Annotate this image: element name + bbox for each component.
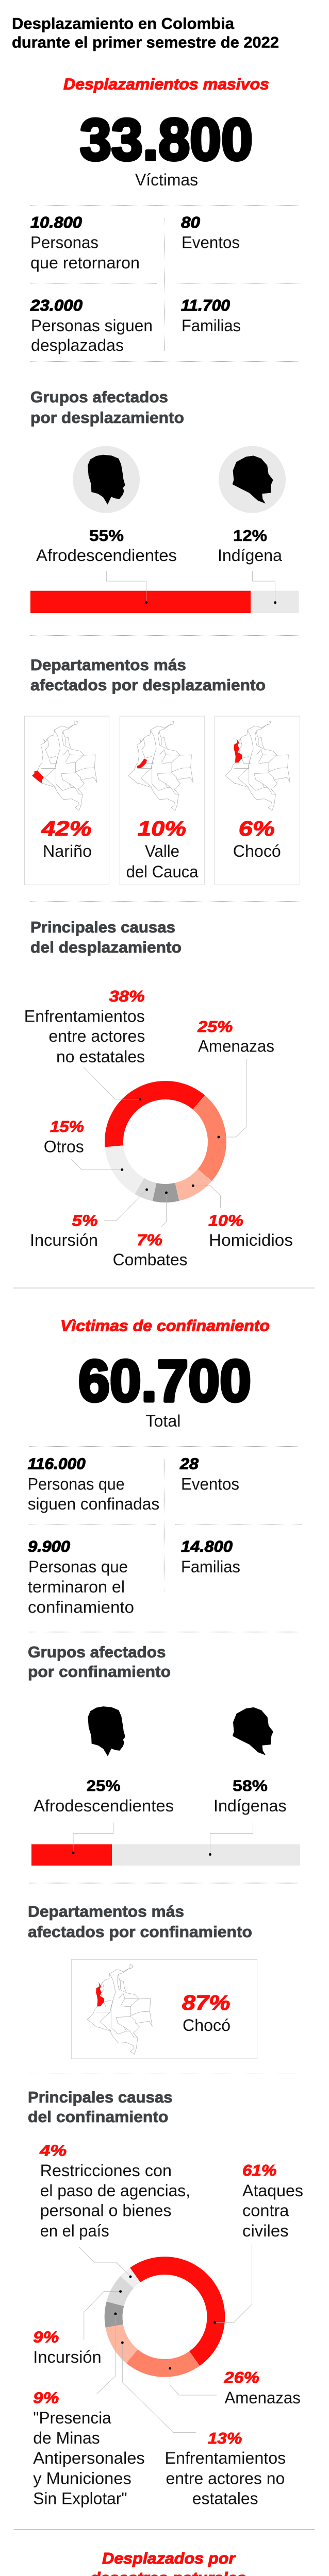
stat: personas siguen desplazadas: Personas siguen xyxy=(31,316,153,335)
stacked bar: confinement groups xyxy=(31,1823,300,1866)
label: 55% afrodescendientes: Afrodescendientes xyxy=(36,546,177,565)
donut chart: causas del confinamiento xyxy=(79,2244,252,2432)
stat: eventos xyxy=(181,213,240,251)
label: 25% amenazas: 25% xyxy=(197,1018,233,1036)
label: 9% incursion: Incursión xyxy=(33,2348,102,2366)
heading: departamentos afectados por desplazamiento: Departamentos más xyxy=(30,656,186,674)
label: 61% ataques: 61% xyxy=(242,2161,276,2179)
stat: personas siguen desplazadas xyxy=(30,296,153,354)
stat: personas siguen confinadas: siguen confinadas xyxy=(28,1495,159,1513)
label: 4% restricciones: en el país xyxy=(40,2222,109,2240)
panel: victimas de confinamiento xyxy=(28,1317,302,1632)
stat: eventos: 28 xyxy=(179,1454,199,1472)
stat: personas que retornaron: que retornaron xyxy=(30,253,140,272)
value Nariño: Nariño xyxy=(43,842,92,860)
label: 13% enfrentamientos: entre actores no xyxy=(166,2469,285,2487)
label: 25% afrodescendientes: Afrodescendientes xyxy=(34,1797,174,1815)
value Valle del Cauca: del Cauca xyxy=(126,862,199,881)
stat: personas que retornaron: 10.800 xyxy=(30,213,82,231)
label: 26% amenazas xyxy=(224,2368,301,2407)
value Chocó: 6% xyxy=(239,817,275,840)
label: 12% indigena: 12% xyxy=(233,527,267,545)
section heading: Desplazados por xyxy=(102,2549,236,2567)
label: 9% incursion xyxy=(33,2328,102,2366)
stat: familias: Familias xyxy=(182,316,241,335)
value Chocó xyxy=(233,817,281,860)
label: 38% enfrentamientos: Enfrentamientos xyxy=(24,1007,145,1025)
stat: familias: 14.800 xyxy=(181,1537,233,1555)
heading: departamentos afectados por confinamiento: Departamentos más xyxy=(28,1903,184,1921)
value Nariño xyxy=(41,817,92,860)
stat: personas siguen confinadas: Personas que xyxy=(28,1475,125,1494)
stat: eventos: 80 xyxy=(181,213,200,231)
value Chocó: Chocó xyxy=(233,842,281,860)
icon: indigenous head silhouette xyxy=(233,1707,273,1755)
map of Colombia with Nariño xyxy=(32,721,97,810)
label: 26% amenazas: Amenazas xyxy=(225,2388,301,2407)
label: 38% enfrentamientos: no estatales xyxy=(56,1047,145,1066)
label: 4% restricciones: el paso de agencias, xyxy=(40,2181,190,2200)
stat: personas siguen desplazadas: desplazadas xyxy=(31,336,124,354)
title xyxy=(12,14,279,52)
title: Desplazamiento en Colombia xyxy=(12,14,235,32)
section heading: Desplazamientos masivos xyxy=(63,75,269,93)
label: 10% homicidios: Homicidios xyxy=(209,1231,293,1249)
heading: departamentos afectados por desplazamiento xyxy=(30,656,266,694)
label: 58% indigenas xyxy=(213,1776,287,1815)
label: 38% enfrentamientos: 38% xyxy=(109,987,145,1005)
big number: victims: 33.800 xyxy=(80,107,253,173)
label: 38% enfrentamientos: entre actores xyxy=(48,1027,145,1045)
big number: confinement total: Total xyxy=(145,1412,180,1430)
label: 4% restricciones: Restricciones con xyxy=(40,2161,172,2180)
label: 58% indigenas: 58% xyxy=(233,1776,268,1794)
stat: eventos: Eventos xyxy=(181,1475,239,1494)
donut chart: causas del desplazamiento xyxy=(71,1059,246,1227)
stat: personas terminaron confinamiento: 9.900 xyxy=(28,1537,70,1555)
stat: eventos xyxy=(179,1454,239,1494)
heading: grupos afectados por confinamiento: Grupos afectados xyxy=(28,1643,166,1661)
map of Colombia with Valle xyxy=(128,721,193,810)
map of Colombia with Chocó xyxy=(87,1964,152,2054)
label: 9% minas: de Minas xyxy=(33,2429,100,2447)
stat: personas que retornaron xyxy=(30,213,140,272)
label: 4% restricciones: personal o bienes xyxy=(40,2201,171,2220)
heading: principales causas del confinamiento xyxy=(28,2088,172,2126)
stat: personas terminaron confinamiento: Personas que xyxy=(28,1557,128,1576)
stat: personas que retornaron: Personas xyxy=(30,233,98,251)
panel: desplazados por desastres naturales xyxy=(25,2549,300,2576)
label: 4% restricciones xyxy=(39,2141,190,2240)
heading: grupos afectados por desplazamiento xyxy=(30,388,184,427)
value Chocó 87%: Chocó xyxy=(183,2016,231,2035)
heading: departamentos afectados por confinamiento xyxy=(28,1903,252,1941)
label: 9% minas: Antipersonales xyxy=(33,2449,145,2467)
label: 26% amenazas: 26% xyxy=(224,2368,259,2386)
icon: afrodescendant head xyxy=(73,446,140,513)
big number: victims: Víctimas xyxy=(135,171,198,189)
label: 12% indigena: Indígena xyxy=(218,546,282,565)
panel: desplazamientos masivos xyxy=(30,75,303,362)
heading: departamentos afectados por confinamiento: afectados por confinamiento xyxy=(28,1923,252,1941)
value Nariño: 42% xyxy=(41,817,92,840)
label: 12% indigena xyxy=(218,527,282,565)
stat: familias: Familias xyxy=(181,1557,240,1576)
icon: afrodescendant head silhouette xyxy=(88,1706,125,1756)
label: 13% enfrentamientos: estatales xyxy=(192,2489,258,2507)
big number: confinement total: 60.700 xyxy=(78,1349,251,1414)
section heading xyxy=(90,2549,246,2576)
label: 7% combates: 7% xyxy=(137,1231,162,1249)
value Valle del Cauca: 10% xyxy=(138,817,186,840)
label: 7% combates xyxy=(113,1231,188,1269)
label: 7% combates: Combates xyxy=(113,1250,188,1269)
label: 25% afrodescendientes xyxy=(34,1776,174,1815)
stat: familias: 11.700 xyxy=(181,296,230,314)
panel: map Nariño xyxy=(25,716,109,885)
title: durante el primer semestre de 2022 xyxy=(12,33,279,52)
label: 58% indigenas: Indígenas xyxy=(213,1797,287,1815)
label: 9% minas: y Municiones xyxy=(33,2469,131,2487)
panel: map Chocó xyxy=(215,716,300,885)
label: 55% afrodescendientes xyxy=(36,527,177,565)
stat: personas terminaron confinamiento xyxy=(28,1537,134,1617)
heading: principales causas del desplazamiento: Principales causas xyxy=(30,918,175,936)
panel: map Chocó 87% xyxy=(71,1960,257,2059)
value Valle del Cauca: Valle xyxy=(145,842,179,860)
stacked bar: groups xyxy=(30,571,299,613)
heading: grupos afectados por confinamiento xyxy=(28,1643,171,1681)
label: 61% ataques: contra xyxy=(242,2201,289,2220)
panel: map Valle del Cauca xyxy=(120,716,205,885)
section heading: Vìctimas de confinamiento xyxy=(60,1317,270,1334)
stat: personas siguen confinadas xyxy=(28,1454,159,1513)
label: 15% otros: Otros xyxy=(44,1138,84,1156)
label: 25% afrodescendientes: 25% xyxy=(87,1776,121,1794)
label: 10% homicidios: 10% xyxy=(208,1212,243,1229)
label: 15% otros xyxy=(44,1117,84,1156)
label: 13% enfrentamientos: 13% xyxy=(208,2429,242,2447)
label: 4% restricciones: 4% xyxy=(39,2141,67,2159)
heading: principales causas del desplazamiento: del desplazamiento xyxy=(30,938,182,956)
map of Colombia with Chocó xyxy=(225,721,290,810)
stat: familias xyxy=(181,1537,240,1576)
label: 10% homicidios xyxy=(208,1212,293,1249)
label: 61% ataques xyxy=(242,2161,303,2240)
label: 5% incursion: 5% xyxy=(72,1212,98,1229)
label: 38% enfrentamientos xyxy=(24,987,145,1066)
label: 9% minas xyxy=(33,2388,145,2507)
label: 55% afrodescendientes: 55% xyxy=(89,527,124,545)
stat: personas siguen confinadas: 116.000 xyxy=(28,1454,86,1472)
value Chocó 87% xyxy=(182,1991,231,2035)
stat: eventos: Eventos xyxy=(182,233,240,251)
label: 9% minas: Sin Explotar" xyxy=(33,2489,127,2507)
heading: grupos afectados por confinamiento: por confinamiento xyxy=(28,1663,171,1681)
heading: principales causas del desplazamiento xyxy=(30,918,182,956)
heading: grupos afectados por desplazamiento: Grupos afectados xyxy=(30,388,168,406)
label: 25% amenazas: Amenazas xyxy=(198,1037,274,1055)
label: 13% enfrentamientos xyxy=(165,2429,286,2507)
value Chocó 87%: 87% xyxy=(182,1991,230,2014)
label: 9% minas: "Presencia xyxy=(33,2409,111,2427)
stat: personas terminaron confinamiento: terminaron el xyxy=(28,1578,125,1596)
label: 25% amenazas xyxy=(197,1018,274,1055)
heading: departamentos afectados por desplazamiento: afectados por desplazamiento xyxy=(30,676,266,694)
label: 61% ataques: civiles xyxy=(242,2222,289,2240)
label: 13% enfrentamientos: Enfrentamientos xyxy=(165,2449,286,2467)
stat: personas terminaron confinamiento: confinamiento xyxy=(28,1598,134,1617)
value Valle del Cauca xyxy=(126,817,199,881)
label: 5% incursion xyxy=(30,1212,98,1249)
label: 61% ataques: Ataques xyxy=(242,2181,303,2200)
heading: principales causas del confinamiento: Principales causas xyxy=(28,2088,172,2106)
label: 9% minas: 9% xyxy=(33,2388,59,2407)
heading: grupos afectados por desplazamiento: por desplazamiento xyxy=(30,409,184,427)
icon: indigenous head xyxy=(219,446,286,513)
label: 5% incursion: Incursión xyxy=(30,1231,98,1249)
label: 9% incursion: 9% xyxy=(33,2328,59,2346)
stat: familias xyxy=(181,296,241,335)
label: 15% otros: 15% xyxy=(50,1117,84,1136)
stat: personas siguen desplazadas: 23.000 xyxy=(30,296,83,314)
heading: principales causas del confinamiento: del confinamiento xyxy=(28,2108,168,2126)
